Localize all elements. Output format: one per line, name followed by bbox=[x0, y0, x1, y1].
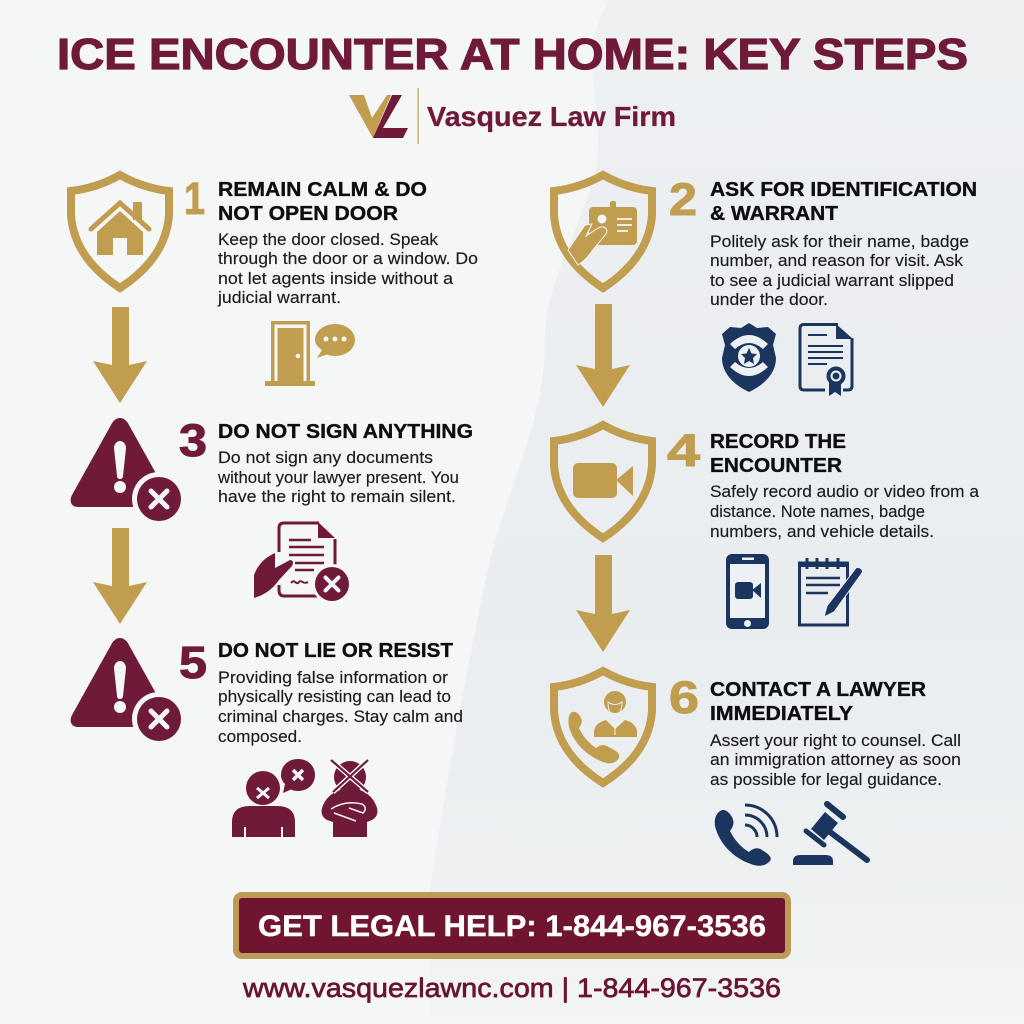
panel: step 2 bbox=[554, 174, 977, 396]
text: step 4 body bbox=[710, 483, 980, 541]
text: step 5 body: physically resisting can lead to bbox=[218, 688, 451, 706]
text: step 6 body: as possible for legal guidance. bbox=[710, 771, 942, 789]
heading: step 6: CONTACT A LAWYER bbox=[710, 678, 926, 701]
text: step 5 body bbox=[218, 669, 463, 746]
icon: silent person with speech bubble bbox=[232, 759, 315, 837]
text: step 6 body: an immigration attorney as soon bbox=[710, 751, 961, 769]
number 2: 2 bbox=[669, 174, 697, 225]
icon: shield with video camera bbox=[554, 425, 652, 538]
arrow: step 2 to 4 bbox=[576, 304, 630, 407]
panel: step 4 bbox=[554, 425, 980, 629]
logo: Vasquez Law Firm: Vasquez Law Firm bbox=[427, 101, 676, 132]
heading: step 1: REMAIN CALM & DO bbox=[218, 178, 427, 201]
icon: shield with ID card bbox=[554, 175, 652, 288]
call to action button bbox=[236, 895, 788, 956]
icon: police badge bbox=[722, 323, 776, 392]
icon: person with crossed arms, crossed out bbox=[322, 760, 377, 837]
text: step 5 body: criminal charges. Stay calm and bbox=[218, 708, 463, 726]
heading: step 4: ENCOUNTER bbox=[710, 454, 842, 477]
text: step 4 body: numbers, and vehicle details. bbox=[710, 523, 934, 541]
heading: step 4 bbox=[710, 430, 846, 477]
text: step 2 body: Politely ask for their name, badge bbox=[710, 233, 969, 251]
title: ICE ENCOUNTER AT HOME: KEY STEPS bbox=[57, 30, 968, 79]
heading: step 1 bbox=[218, 178, 427, 225]
number 4: 4 bbox=[667, 425, 700, 476]
number 3: 3 bbox=[179, 415, 207, 466]
text: step 3 body bbox=[217, 449, 459, 506]
heading: step 2: & WARRANT bbox=[710, 202, 838, 225]
icon: smartphone recording video bbox=[726, 554, 769, 629]
panel: step 6 bbox=[554, 671, 961, 866]
text: step 1 body bbox=[217, 231, 478, 307]
text: step 2 body: number, and reason for visit. Ask bbox=[710, 252, 964, 270]
icon: notepad and pen bbox=[798, 558, 862, 625]
text: step 6 body: Assert your right to counsel. Call bbox=[710, 732, 961, 750]
text: step 5 body: composed. bbox=[218, 728, 302, 746]
text: step 4 body: Safely record audio or video from a bbox=[710, 483, 980, 501]
arrow: step 3 to 5 bbox=[93, 528, 147, 624]
heading: step 6 bbox=[710, 678, 926, 725]
heading: step 3: DO NOT SIGN ANYTHING bbox=[218, 420, 473, 443]
number 5: 5 bbox=[179, 637, 207, 688]
text: step 3 body: Do not sign any documents bbox=[218, 449, 433, 467]
icon: gavel bbox=[793, 804, 867, 865]
icon: warning triangle with x bbox=[71, 418, 186, 526]
text: step 1 body: not let agents inside without a bbox=[218, 270, 454, 288]
icon: door and speech bubble bbox=[265, 321, 355, 386]
number 1: 1 bbox=[184, 173, 205, 224]
footer contact line: www.vasquezlawnc.com | 1-844-967-3536 bbox=[242, 973, 781, 1003]
icon: ringing telephone bbox=[715, 805, 777, 866]
number 6: 6 bbox=[669, 672, 699, 723]
text: step 3 body: without your lawyer present. You bbox=[217, 469, 459, 487]
icon: shield with phone and lawyer bbox=[554, 671, 652, 783]
text: step 4 body: distance. Note names, badge bbox=[710, 503, 925, 521]
heading: step 2 bbox=[710, 178, 977, 225]
text: step 6 body bbox=[710, 732, 961, 789]
text: step 1 body: through the door or a window. Do bbox=[218, 250, 478, 268]
icon: warrant document with seal bbox=[800, 324, 853, 396]
icon: signing document with x bbox=[254, 522, 352, 604]
arrow: step 1 to 3 bbox=[93, 307, 147, 403]
text: step 2 body: to see a judicial warrant slipped bbox=[710, 272, 954, 290]
logo: Vasquez Law Firm bbox=[349, 88, 676, 144]
heading: step 1: NOT OPEN DOOR bbox=[218, 202, 398, 225]
heading: step 4: RECORD THE bbox=[710, 430, 846, 453]
arrow: step 4 to 6 bbox=[576, 555, 630, 652]
panel: step 5 bbox=[71, 637, 463, 837]
text: step 5 body: Providing false information or bbox=[218, 669, 449, 687]
panel: step 3 bbox=[71, 415, 473, 604]
icon: shield with house bbox=[71, 175, 169, 288]
heading: step 5: DO NOT LIE OR RESIST bbox=[218, 639, 453, 662]
panel: step 1 bbox=[71, 173, 478, 386]
heading: step 6: IMMEDIATELY bbox=[710, 702, 853, 725]
text: step 2 body: under the door. bbox=[710, 291, 828, 309]
text: step 1 body: Keep the door closed. Speak bbox=[218, 231, 439, 249]
call to action button: GET LEGAL HELP: 1-844-967-3536 bbox=[258, 910, 766, 943]
text: step 2 body bbox=[710, 233, 969, 309]
icon: warning triangle with x bbox=[71, 638, 186, 746]
text: step 1 body: judicial warrant. bbox=[217, 289, 341, 307]
text: step 3 body: have the right to remain silent. bbox=[218, 488, 456, 506]
heading: step 2: ASK FOR IDENTIFICATION bbox=[710, 178, 977, 201]
